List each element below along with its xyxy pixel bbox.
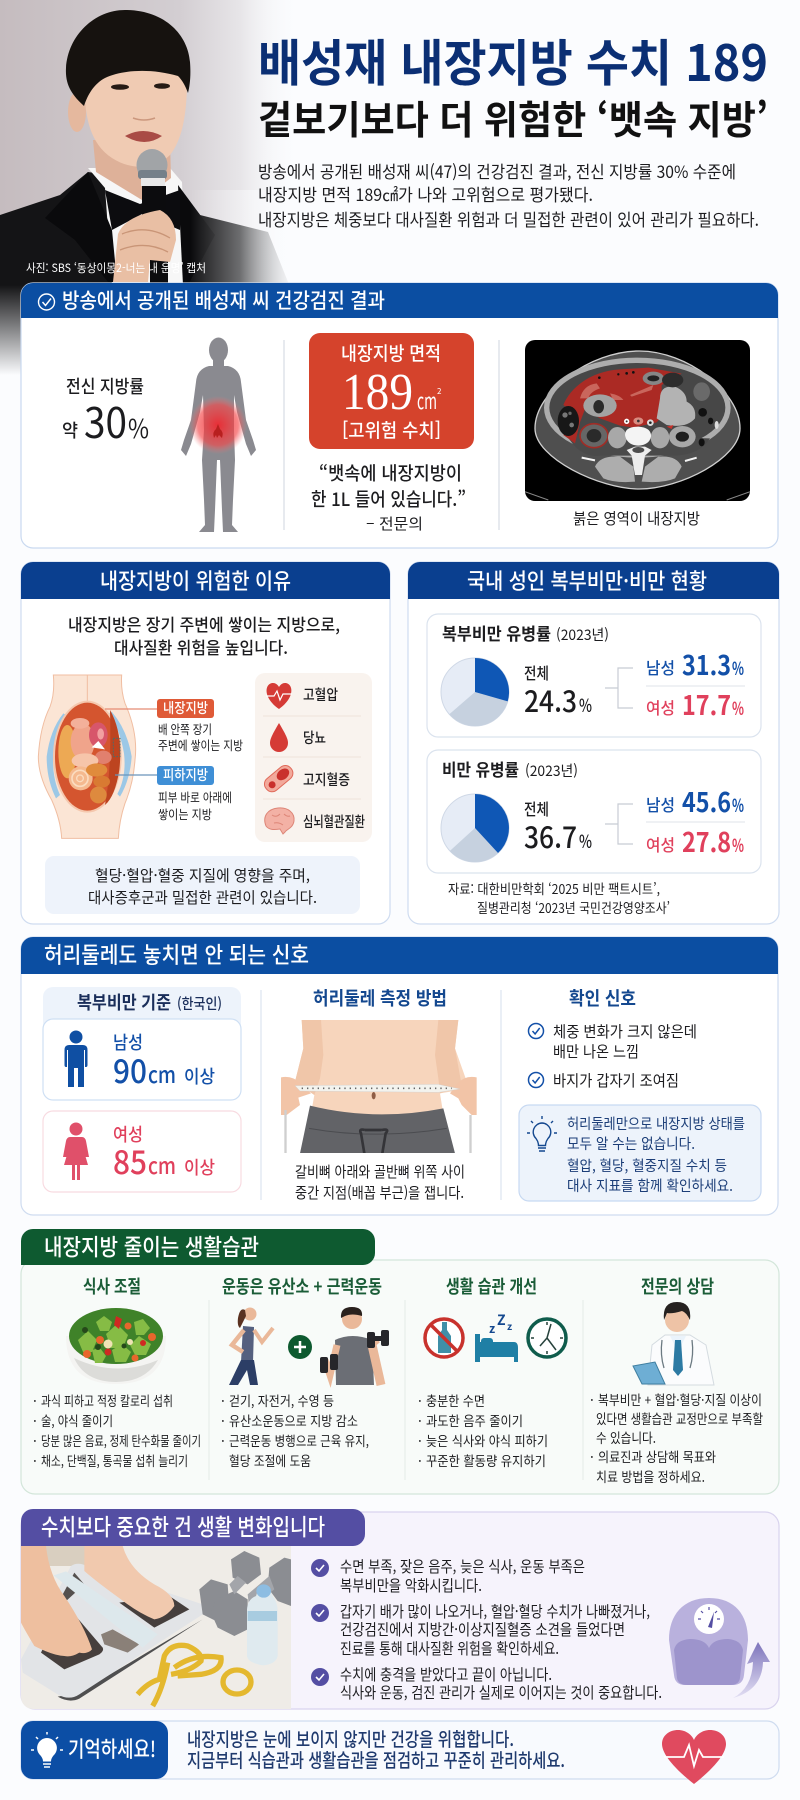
callout: remember	[21, 1721, 779, 1784]
icon: heart with pulse	[662, 1730, 726, 1784]
female criterion: 85	[113, 1138, 147, 1184]
panel: why visceral fat is dangerous	[21, 562, 390, 924]
expert quote: – 전문의	[366, 513, 423, 534]
body fat stat	[62, 373, 149, 451]
point 3	[311, 1663, 662, 1703]
card: obesity: 비만 유병률	[442, 756, 519, 781]
male value: 31.3	[682, 644, 731, 683]
icon: scale with rising arrow	[669, 1598, 770, 1698]
panel header tab: 수치보다 중요한 건 생활 변화입니다	[41, 1508, 325, 1542]
panel header	[21, 562, 390, 599]
female value: 여성	[646, 695, 675, 719]
icon: blood drop	[270, 723, 288, 752]
note box with bulb: 모두 알 수는 없습니다.	[567, 1133, 695, 1154]
source note: 자료: 대한비만학회 ‘2025 비만 팩트시트’,	[448, 878, 660, 898]
note box: 혈당·혈압·혈중 지질에 영향을 주며,	[95, 864, 310, 886]
icon: salad bowl	[66, 1308, 166, 1384]
intro paragraph: 내장지방은 체중보다 대사질환 위험과 더 밀접한 관련이 있어 관리가 필요하다.	[258, 206, 759, 231]
female criterion	[43, 1111, 241, 1192]
note box with bulb: 혈압, 혈당, 혈중지질 수치 등	[567, 1155, 727, 1176]
column: diet: 술, 야식 줄이기	[41, 1410, 113, 1430]
column: consult specialist: 복부비만 + 혈압·혈당·지질 이상이	[598, 1389, 762, 1409]
female criterion: 이상	[184, 1154, 215, 1180]
card: abdominal obesity	[427, 614, 761, 737]
female value: 27.8	[682, 821, 731, 860]
total value: %	[579, 692, 592, 718]
disease label: hyperlipidemia: 고지혈증	[303, 769, 350, 790]
column: diet: ·	[33, 1410, 37, 1430]
column: exercise	[221, 1273, 389, 1470]
column: sleep habits: 충분한 수면	[426, 1390, 485, 1410]
column: consult specialist: ·	[590, 1389, 594, 1409]
column: exercise: 유산소운동으로 지방 감소	[229, 1410, 358, 1430]
panel header tab: 내장지방 줄이는 생활습관	[44, 1228, 259, 1262]
male value: 남성	[646, 655, 675, 679]
icon: runner	[229, 1308, 273, 1385]
column: exercise: ·	[221, 1430, 225, 1450]
column: consult specialist: 치료 방법을 정하세요.	[596, 1466, 705, 1486]
remember badge	[21, 1721, 168, 1779]
icon: body silhouette with red abdomen	[181, 338, 256, 532]
column: diet: 당분 많은 음료, 정제 탄수화물 줄이기	[41, 1430, 201, 1450]
column: exercise: 걷기, 자전거, 수영 등	[229, 1390, 334, 1410]
male value: %	[732, 655, 744, 681]
label: subcutaneous fat: 피부 바로 아래에	[158, 787, 232, 806]
card: abdominal obesity: (2023년)	[556, 624, 609, 645]
point 2	[311, 1600, 650, 1659]
warning sign 1	[528, 1020, 697, 1062]
intro paragraph	[258, 158, 759, 231]
intro paragraph: 내장지방 면적 189㎠가 나와 고위험으로 평가됐다.	[258, 181, 593, 206]
female criterion: 여성	[113, 1121, 143, 1147]
icon: female figure	[63, 1122, 89, 1180]
panel header: 내장지방이 위험한 이유	[100, 564, 291, 596]
male criterion: 이상	[184, 1063, 215, 1089]
icon: no alcohol	[425, 1319, 463, 1357]
icon: light bulb	[31, 1732, 63, 1767]
callout: visceral fat area 189: 내장지방 면적	[341, 339, 441, 366]
icon: brain	[265, 808, 294, 834]
note box with bulb: 허리둘레만으로 내장지방 상태를	[567, 1113, 745, 1134]
abdomen cross-section illustration	[38, 675, 136, 838]
icon: man with dumbbells	[320, 1307, 389, 1385]
panel header: 방송에서 공개된 배성재 씨 건강검진 결과	[62, 285, 385, 315]
female value: 여성	[646, 832, 675, 856]
list: related diseases	[255, 673, 372, 842]
CT scan image	[525, 340, 750, 501]
card: abdominal obesity: 복부비만 유병률	[442, 620, 551, 645]
label: visceral fat: 주변에 쌓이는 지방	[158, 735, 243, 754]
waist measure caption	[295, 1161, 465, 1203]
body fat stat: 30	[84, 390, 127, 451]
column: consult specialist: 수 있습니다.	[596, 1427, 656, 1447]
warning sign 1: 배만 나온 느낌	[553, 1040, 639, 1062]
panel header: 국내 성인 복부비만·비만 현황	[467, 564, 707, 596]
abdominal obesity criteria: 복부비만 기준	[77, 989, 171, 1015]
male value	[646, 644, 744, 683]
point 2: 건강검진에서 지방간·이상지질혈증 소견을 들었다면	[340, 1618, 625, 1640]
lead text: 대사질환 위험을 높입니다.	[114, 634, 288, 659]
male value: 남성	[646, 792, 675, 816]
male criterion: cm	[148, 1056, 176, 1090]
total value: 전체	[524, 660, 549, 684]
disease label: hypertension: 고혈압	[303, 684, 338, 705]
waist measure caption: 갈비뼈 아래와 골반뼈 위쪽 사이	[295, 1161, 465, 1182]
body fat stat: %	[128, 409, 149, 446]
total value: 전체	[524, 796, 549, 820]
heading: warning signs: 확인 신호	[569, 985, 636, 1011]
source note	[448, 878, 670, 917]
heading: waist measuring method: 허리둘레 측정 방법	[313, 985, 447, 1011]
point 1: 복부비만을 악화시킵니다.	[340, 1574, 482, 1596]
icon: bed with zzz: Z	[497, 1310, 506, 1330]
column: sleep habits: ·	[418, 1450, 422, 1470]
column: consult specialist: 전문의 상담	[641, 1273, 714, 1299]
label: subcutaneous fat	[115, 765, 232, 823]
column: exercise: 운동은 유산소 + 근력운동	[222, 1273, 382, 1299]
callout: visceral fat area 189	[309, 333, 474, 449]
male value: %	[732, 792, 744, 818]
icon: clogged blood vessel	[262, 763, 296, 795]
point 3: 식사와 운동, 검진 관리가 실제로 이어지는 것이 중요합니다.	[340, 1681, 662, 1703]
remember message: 내장지방은 눈에 보이지 않지만 건강을 위협합니다.	[187, 1725, 514, 1752]
icon: clock	[528, 1319, 566, 1357]
remember badge: 기억하세요!	[68, 1732, 156, 1764]
female value	[646, 684, 744, 723]
point 2: 진료를 통해 대사질환 위험을 확인하세요.	[340, 1637, 559, 1659]
panel: waist signals	[21, 937, 778, 1215]
photo: feet on scale with dumbbells	[21, 1546, 291, 1709]
pie chart	[441, 658, 509, 726]
hero photo: man with microphone	[0, 0, 300, 375]
panel header	[21, 937, 778, 974]
column: exercise: 혈당 조절에 도움	[229, 1450, 311, 1470]
point 1	[311, 1555, 585, 1596]
column: sleep habits	[418, 1273, 566, 1470]
icon: bed with zzz	[475, 1310, 518, 1362]
column: sleep habits: ·	[418, 1430, 422, 1450]
panel header: 허리둘레도 놓치면 안 되는 신호	[44, 938, 309, 970]
column: exercise: 근력운동 병행으로 근육 유지,	[229, 1430, 369, 1450]
disease label: diabetes: 당뇨	[303, 727, 326, 748]
column: consult specialist: 있다면 생활습관 교정만으로 부족할	[596, 1408, 763, 1428]
remember message	[187, 1725, 565, 1773]
label: subcutaneous fat: 쌓이는 지방	[158, 804, 212, 823]
label: visceral fat: 내장지방	[163, 698, 208, 718]
column: diet: 과식 피하고 적정 칼로리 섭취	[41, 1390, 173, 1410]
female value	[646, 821, 744, 860]
column: consult specialist: 의료진과 상담해 목표와	[598, 1446, 716, 1466]
male criterion: 남성	[113, 1029, 143, 1055]
column: sleep habits: ·	[418, 1410, 422, 1430]
column: diet: 채소, 단백질, 통곡물 섭취 늘리기	[41, 1450, 188, 1470]
body fat stat: 약	[62, 417, 78, 443]
note box with bulb: 대사 지표를 함께 확인하세요.	[567, 1175, 733, 1196]
warning sign 2: 바지가 갑자기 조여짐	[553, 1069, 679, 1091]
disease label: cardio-cerebrovascular disease: 심뇌혈관질환	[303, 811, 365, 832]
icon: light bulb	[527, 1116, 557, 1151]
callout: visceral fat area 189: 189	[342, 364, 413, 421]
panel header	[21, 283, 778, 318]
abdominal obesity criteria: (한국인)	[177, 993, 222, 1014]
label: visceral fat: 배 안쪽 장기	[158, 719, 212, 738]
column: sleep habits: ·	[418, 1390, 422, 1410]
card: obesity: (2023년)	[525, 760, 578, 781]
total value	[524, 660, 592, 721]
icon: heart	[266, 683, 292, 709]
point 1: 수면 부족, 잦은 음주, 늦은 식사, 운동 부족은	[340, 1555, 585, 1577]
icon: bed with zzz: z	[489, 1320, 495, 1337]
female value: %	[732, 832, 744, 858]
note box with bulb	[519, 1105, 761, 1201]
callout: visceral fat area 189: cm	[417, 384, 437, 416]
panel: health check results	[21, 283, 778, 548]
column: consult specialist: ·	[590, 1446, 594, 1466]
warning sign 1: 체중 변화가 크지 않은데	[553, 1020, 697, 1042]
male criterion	[43, 1019, 241, 1100]
waist measure caption: 중간 지점(배꼽 부근)을 잽니다.	[295, 1182, 464, 1203]
callout: visceral fat area 189: [고위험 수치]	[342, 416, 441, 443]
source note: 질병관리청 ‘2023년 국민건강영양조사’	[477, 897, 670, 917]
point 3: 수치에 충격을 받았다고 끝이 아닙니다.	[340, 1663, 552, 1685]
panel: lifestyle habits	[21, 1228, 779, 1494]
column: diet	[33, 1273, 201, 1470]
column: sleep habits: 과도한 음주 줄이기	[426, 1410, 523, 1430]
total value: %	[579, 828, 592, 854]
expert quote: “뱃속에 내장지방이	[319, 460, 462, 486]
remember message: 지금부터 식습관과 생활습관을 점검하고 꾸준히 관리하세요.	[187, 1746, 565, 1773]
panel: prevalence of obesity	[408, 562, 779, 924]
icon: male figure	[64, 1030, 88, 1087]
column: diet: ·	[33, 1390, 37, 1410]
point 2: 갑자기 배가 많이 나오거나, 혈압·혈당 수치가 나빠졌거나,	[340, 1600, 650, 1622]
column: sleep habits: 생활 습관 개선	[446, 1273, 537, 1299]
label: visceral fat	[105, 698, 243, 754]
total value: 24.3	[524, 679, 577, 721]
column: diet: 식사 조절	[83, 1273, 141, 1299]
male criterion: 90	[113, 1047, 147, 1093]
icon: bed with zzz: z	[507, 1318, 512, 1333]
expert quote: 한 1L 들어 있습니다.”	[311, 486, 466, 512]
subtitle: 겉보기보다 더 위험한 ‘뱃속 지방’	[258, 90, 768, 146]
panel header	[408, 562, 779, 599]
column: sleep habits: 꾸준한 활동량 유지하기	[426, 1450, 546, 1470]
pie chart	[441, 794, 509, 862]
panel header tab	[21, 1228, 375, 1265]
lead text	[68, 611, 340, 659]
column: sleep habits: 늦은 식사와 야식 피하기	[426, 1430, 548, 1450]
abdominal obesity criteria	[43, 987, 241, 1192]
CT caption: 붉은 영역이 내장지방	[573, 507, 700, 529]
callout: visceral fat area 189: 2	[437, 386, 442, 397]
note box: 대사증후군과 밀접한 관련이 있습니다.	[88, 886, 317, 908]
male value	[646, 781, 744, 820]
intro paragraph: 방송에서 공개된 배성재 씨(47)의 건강검진 결과, 전신 지방률 30% 수준에	[258, 158, 736, 183]
column: exercise: ·	[221, 1390, 225, 1410]
female criterion: cm	[148, 1147, 176, 1181]
female value: %	[732, 695, 744, 721]
card: obesity	[427, 750, 761, 873]
column: consult specialist	[590, 1273, 763, 1486]
label: subcutaneous fat: 피하지방	[163, 765, 208, 785]
photo: measuring waist with tape	[281, 1020, 478, 1153]
title: 배성재 내장지방 수치 189	[258, 24, 768, 96]
male value: 45.6	[682, 781, 731, 820]
note box	[45, 856, 360, 914]
column: diet: ·	[33, 1430, 37, 1450]
icon: doctor	[633, 1302, 714, 1385]
lead text: 내장지방은 장기 주변에 쌓이는 지방으로,	[68, 611, 340, 636]
body fat stat: 전신 지방률	[66, 373, 144, 399]
column: exercise: ·	[221, 1410, 225, 1430]
icon: plus	[288, 1335, 312, 1359]
expert quote	[311, 460, 466, 534]
column: diet: ·	[33, 1450, 37, 1470]
female value: 17.7	[682, 684, 731, 723]
total value	[524, 796, 592, 857]
total value: 36.7	[524, 815, 577, 857]
panel: lifestyle change matters	[21, 1508, 779, 1709]
photo credit caption: 사진: SBS ‘동상이몽2-너는 내 운명’ 캡처	[26, 260, 206, 276]
